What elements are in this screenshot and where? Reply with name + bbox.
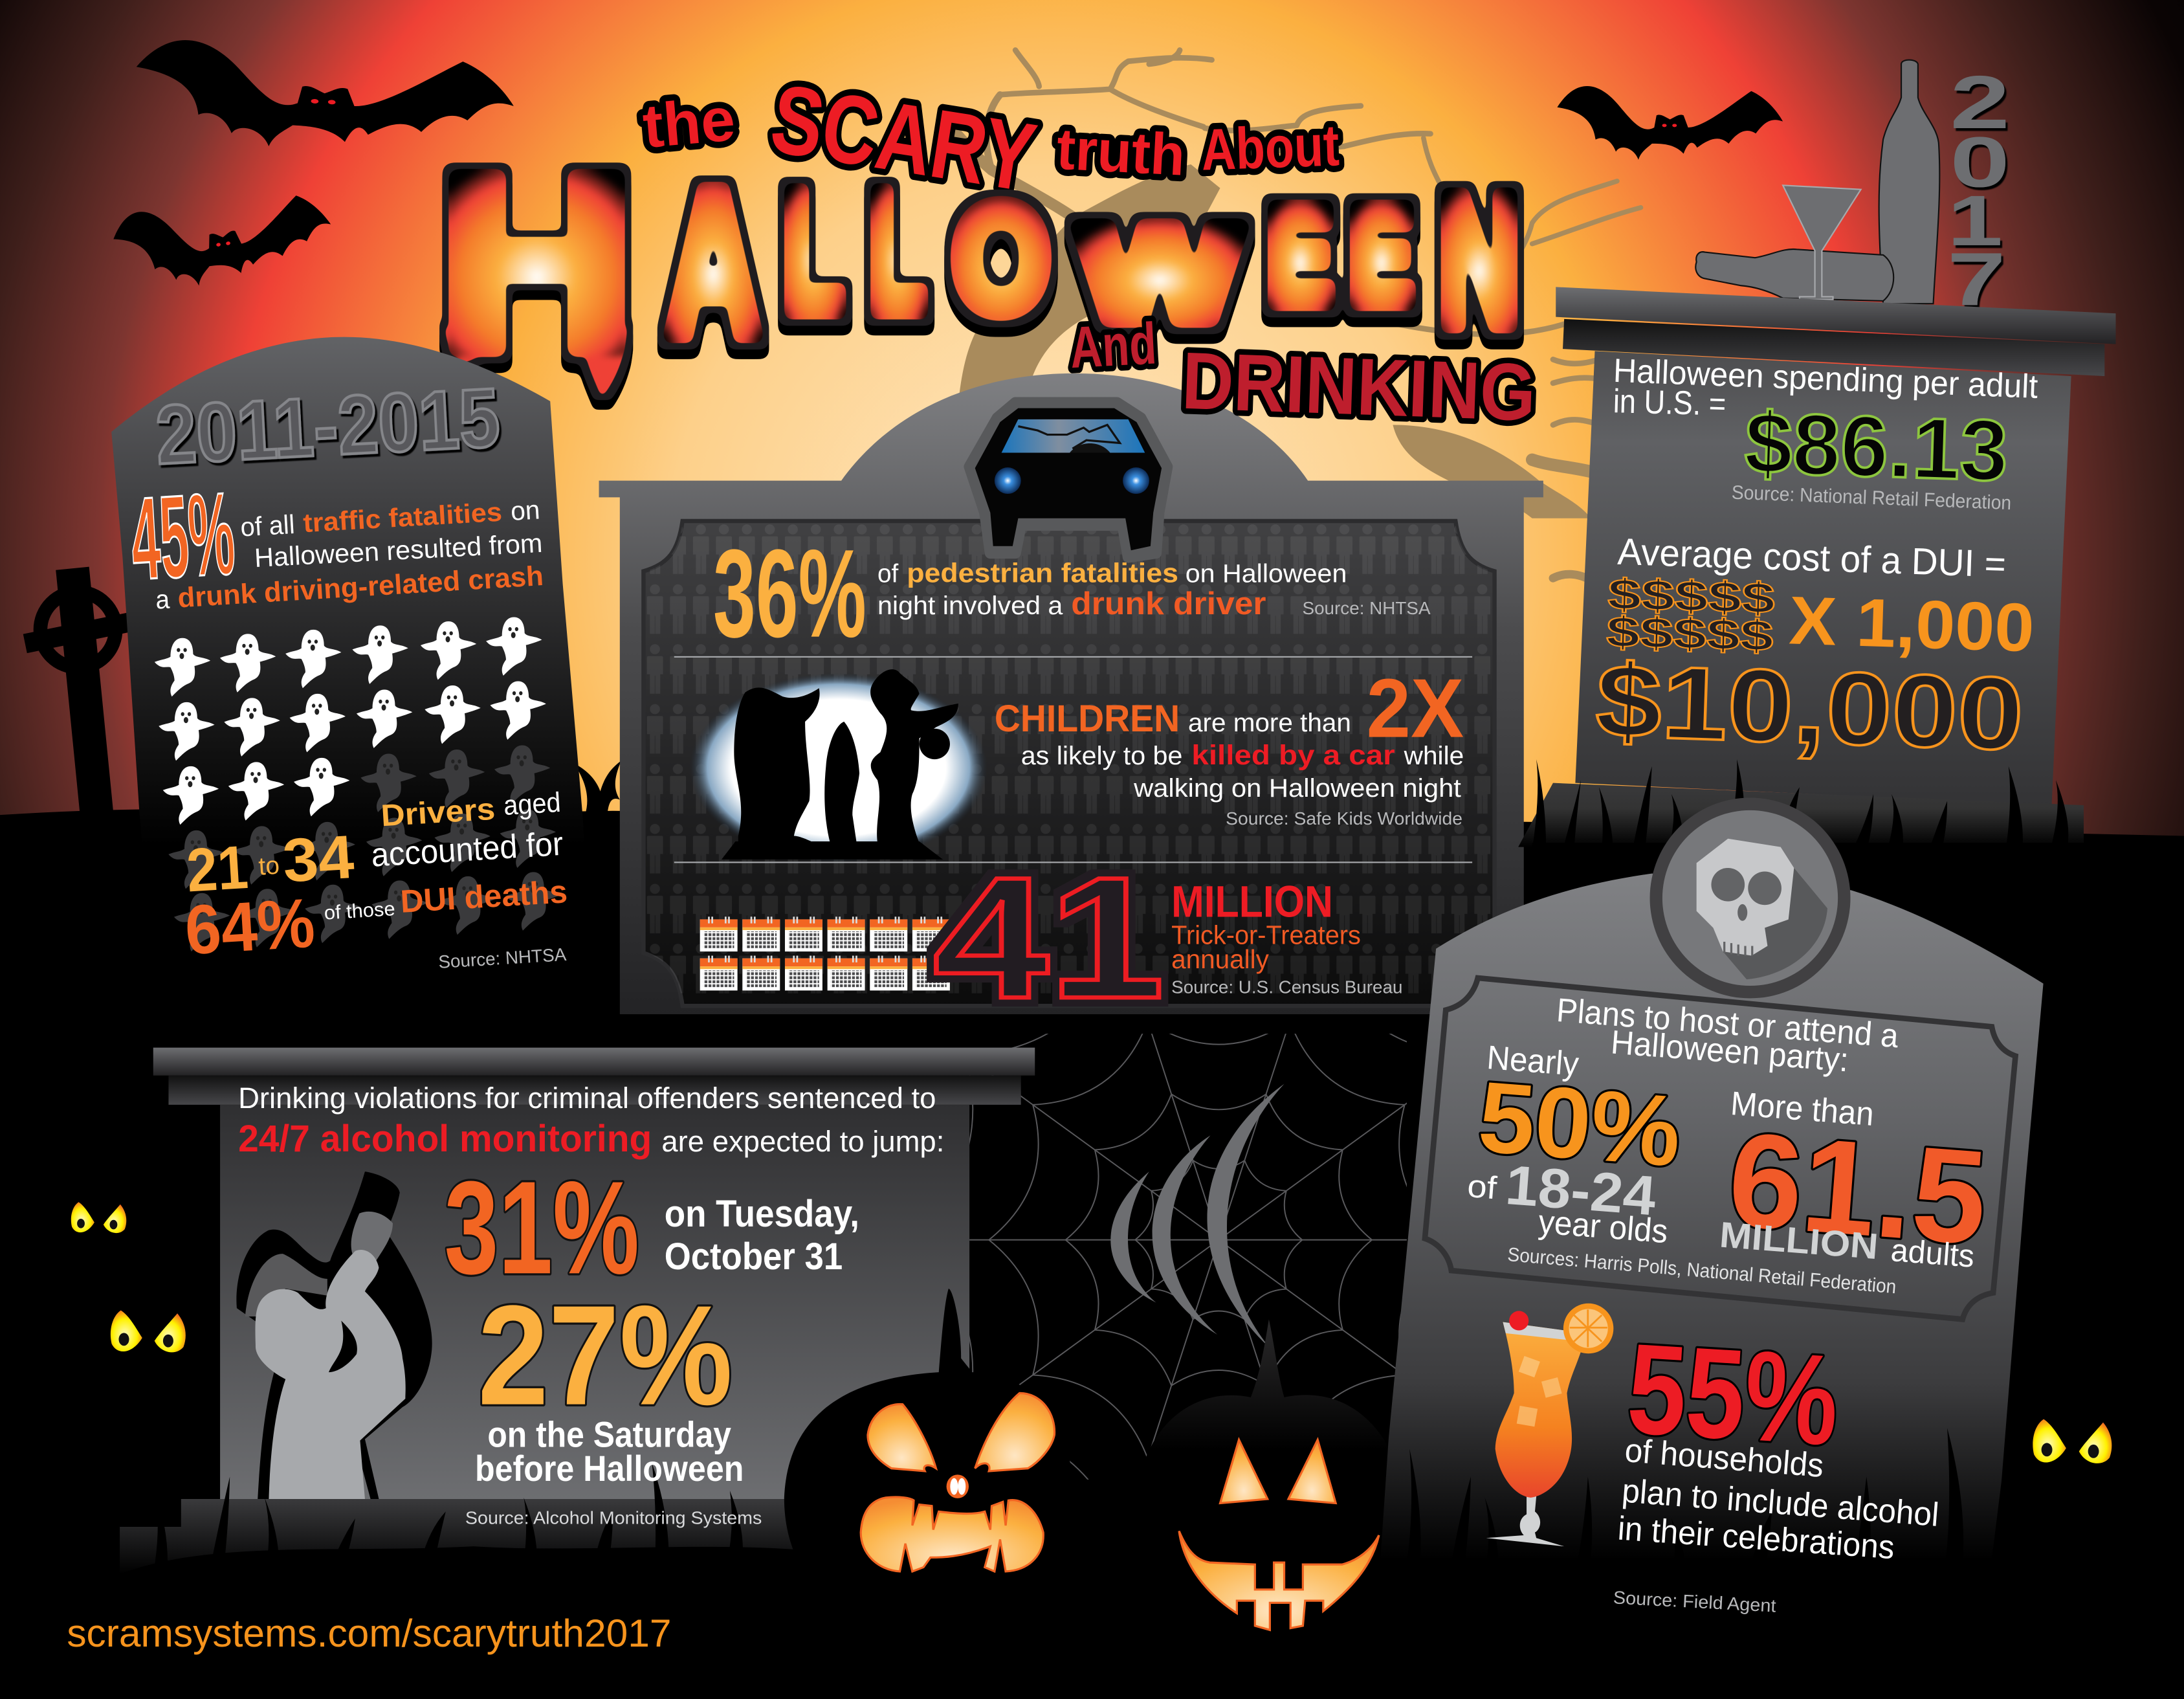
tombstone shape [1379,874,2044,1581]
pumpkin: left angry [784,1289,1074,1628]
year: 2017: 7 [1947,237,2006,321]
pumpkin: right jack-o-lantern [1135,1319,1410,1645]
stat: nearly 50% of 18-24: of [1466,1168,1498,1206]
stat: nearly 50% of 18-24: year olds [1537,1203,1669,1250]
title word: DRINKING: DRINKING [1180,336,1538,438]
bat: top left large [133,38,516,159]
year: 2017: 0 [1950,122,2010,202]
stat: children 2X: as likely to be [1021,742,1182,770]
text: traffic fatalities: traffic fatalities [302,497,503,538]
divider [674,861,1472,863]
stat: 64% of those DUI deaths: 64% [183,883,317,969]
stat: 64% of those DUI deaths [183,874,568,969]
stat: nearly 50% of 18-24 [1466,1038,1684,1250]
title word: HALLOWEEN [440,124,1519,401]
text: cost of a DUI: $10,000 [1594,643,2025,772]
text: drinking violations: 24/7 alcohol monitoring [238,1118,652,1160]
stat: children 2X: Source: Safe Kids Worldwide [1226,808,1462,828]
stat: 27% saturday: on the Saturday [487,1414,731,1454]
stat: 36% pedestrian fatalities: on Halloween [1186,560,1347,588]
text: spending per adult: in U.S. = [1613,382,1726,423]
spider web [969,1034,1407,1480]
text: traffic fatalities: Halloween resulted from [254,528,543,573]
stat: 41 million: MILLION [1171,876,1333,926]
stat: 55% of households: of households [1624,1431,1825,1484]
text: traffic fatalities: a [155,584,170,615]
text: traffic fatalities: drunk driving-related crash [177,561,544,614]
bat: top right [1557,86,1783,160]
title word: HALLOWEEN: E [1268,179,1333,331]
title word: HALLOWEEN: O [953,174,1050,343]
panel: bottom-left plinth alcohol monitoring [120,1048,1035,1581]
stat: more than 61.5 million: 61.5 [1723,1104,1992,1272]
stat: more than 61.5 million: MILLION [1718,1214,1880,1267]
text: drivers aged 21 to 34: accounted for [370,825,564,874]
stat: 55% of households: in their celebrations [1616,1509,1896,1566]
stat: children 2X: while [1404,742,1464,770]
illustration: reaper drinking [236,1172,432,1499]
crescents on web [1110,1084,1285,1349]
text: cost of a DUI: Average cost of a DUI = [1617,531,2007,586]
stat: children 2X: killed by a car [1191,740,1395,771]
stat: 36% pedestrian fatalities: Source: NHTSA [1303,598,1431,618]
stat: 36% pedestrian fatalities: night involved a [877,592,1063,620]
gravestone cross silhouette [25,568,134,822]
icons: calendars [700,916,950,990]
heading: 2011-2015: 2011-2015 [153,371,502,482]
panel: left tombstone 2011-2015: 45% [127,468,238,605]
text: spending per adult: Source: National Retail Federation [1731,482,2012,514]
text: drivers aged 21 to 34: 34 [281,823,356,895]
text: drivers aged 21 to 34: to [258,852,280,881]
panel: center plaque [599,373,1543,1034]
stat: children 2X: 2X [1367,662,1464,755]
text: drivers aged 21 to 34: aged [503,787,562,821]
plinth steps [120,1499,947,1574]
stat: children 2X: walking on Halloween night [1133,774,1461,803]
stat: more than 61.5 million: More than [1729,1084,1875,1133]
text: traffic fatalities: on [510,494,541,526]
grass silhouette over base [120,1463,835,1581]
stat: 41 million: annually [1171,944,1269,974]
skull medallion [1650,797,1850,998]
text: traffic fatalities [155,494,544,615]
text: cost of a DUI: $$$$$ [1605,608,1774,660]
text: spending per adult: Halloween spending per adult [1613,351,2038,405]
glowing eyes: right [2033,1419,2112,1463]
text: plans to host: Halloween party: [1609,1023,1850,1078]
title word: HALLOWEEN: H [440,124,634,401]
grass silhouette over plinth base [1532,759,2090,867]
stat: nearly 50% of 18-24: 18-24 [1503,1154,1658,1227]
bare tree silhouette [947,50,1641,583]
stat: 31% on Tuesday: 31% [445,1154,639,1302]
stat: 36% pedestrian fatalities: pedestrian fatalities [907,558,1178,588]
text: cost of a DUI: $$$$$ [1607,571,1776,623]
title: the scary truth about halloween [440,63,1519,401]
stat: 55% of households: 55% [1624,1316,1842,1472]
text: drivers aged 21 to 34: Drivers [380,792,496,833]
year: 2017: 2 [1950,60,2010,144]
stat: 41 million: Source: U.S. Census Bureau [1171,977,1402,997]
stat: children 2X: are more than [1188,709,1351,737]
inner notched border [1425,978,2016,1319]
black ground [0,808,2184,1699]
plinth second tier [1563,319,2104,376]
title word: HALLOWEEN: E [1350,179,1413,331]
text: drivers aged 21 to 34 [184,787,564,905]
text: cost of a DUI [1594,531,2035,772]
stat: 31% on Tuesday [445,1154,859,1302]
grass silhouette over tombstone base [1393,1428,2005,1595]
stat: 36% pedestrian fatalities [713,524,1431,664]
icon: car [969,403,1167,557]
text: traffic fatalities: of all [239,509,296,542]
stat: 41 million: 41 [933,841,1164,1034]
title word: HALLOWEEN: W [1081,198,1239,348]
stat: more than 61.5 million: adults [1890,1232,1976,1274]
text: spending per adult: $86.13 [1743,395,2009,499]
glowing eyes: left upper [71,1202,126,1233]
plinth base [1518,783,2084,847]
sources: harris polls: Sources: Harris Polls, National Retail Federation [1506,1244,1897,1298]
text: plans to host: Plans to host or attend a [1555,991,1900,1054]
stat: 27% saturday: 27% [478,1276,733,1435]
title word: And: And [1068,311,1158,381]
stat: 64% of those DUI deaths: of those [324,898,396,924]
text: drivers aged 21 to 34: 21 [184,833,250,905]
stat: 31% on Tuesday: on Tuesday, [665,1193,859,1235]
plaque inner panel [643,521,1495,1006]
website url: scramsystems.com/scarytruth2017 [67,1611,671,1655]
stat: children 2X [995,662,1464,828]
year: 2017 [1947,60,2010,321]
title word: HALLOWEEN: L [783,155,844,348]
stat: 41 million: Trick-or-Treaters [1171,920,1361,949]
title word: HALLOWEEN: L [869,155,926,348]
title word: HALLOWEEN: A [666,146,761,379]
source: field agent: Source: Field Agent [1613,1587,1777,1616]
twig silhouette [574,761,621,815]
title word: About: About [1200,113,1340,183]
bat: left small [110,186,336,296]
people pattern [646,524,1492,1003]
panel: right tombstone party plans [1379,797,2044,1616]
title word: SCARY: SCARY [764,63,1042,212]
plinth body [220,1105,969,1499]
icon: cocktail [1486,1304,1613,1546]
illustration: trick-or-treaters silhouette [689,669,987,862]
stat: nearly 50% of 18-24: 50% [1475,1060,1684,1188]
plinth cap [153,1048,1035,1076]
stat: 36% pedestrian fatalities: of [877,560,899,588]
stat: 55% of households: plan to include alcohol [1621,1471,1940,1533]
text: drinking violations: are expected to jump: [661,1125,944,1158]
stat: 27% saturday: before Halloween [475,1448,744,1489]
plaque frame with arch [599,373,1543,1014]
stat: 64% of those DUI deaths: DUI deaths [399,874,568,920]
title word: truth: truth [1055,117,1187,188]
text: drinking violations [238,1082,944,1160]
source: NHTSA: Source: NHTSA [437,944,567,972]
title word: HALLOWEEN: N [1439,157,1519,364]
plinth body [1575,351,2071,805]
text: drinking violations: Drinking violations for criminal offenders sentenced to [238,1082,936,1115]
year: 2017: 1 [1947,181,2003,261]
divider [674,656,1472,658]
title: and drinking [1068,311,1538,438]
ghost icons: 15 of 33 [155,617,546,825]
title word: the: the [640,85,738,161]
tombstone shape [111,337,593,972]
panel: left tombstone 2011-2015 [111,337,593,972]
stat: 36% pedestrian fatalities: 36% [713,524,866,664]
plinth cap [1556,287,2116,344]
source: alcohol monitoring systems: Source: Alcohol Monitoring Systems [465,1508,762,1528]
icon: bottles and martini glass [1695,60,1939,304]
stat: children 2X: CHILDREN [995,698,1180,740]
text: cost of a DUI: X 1,000 [1788,583,2035,666]
stat: 31% on Tuesday: October 31 [665,1236,843,1278]
glowing eyes: left lower [111,1310,186,1352]
stat: 55% of households [1616,1316,1940,1566]
stat: 41 million [933,841,1402,1034]
panel: right plinth spending and DUI [1518,60,2116,867]
stat: nearly 50% of 18-24: Nearly [1486,1038,1580,1083]
stat: 36% pedestrian fatalities: drunk driver [1071,586,1266,621]
text: spending per adult [1613,351,2038,514]
plinth second tier [168,1076,1021,1105]
